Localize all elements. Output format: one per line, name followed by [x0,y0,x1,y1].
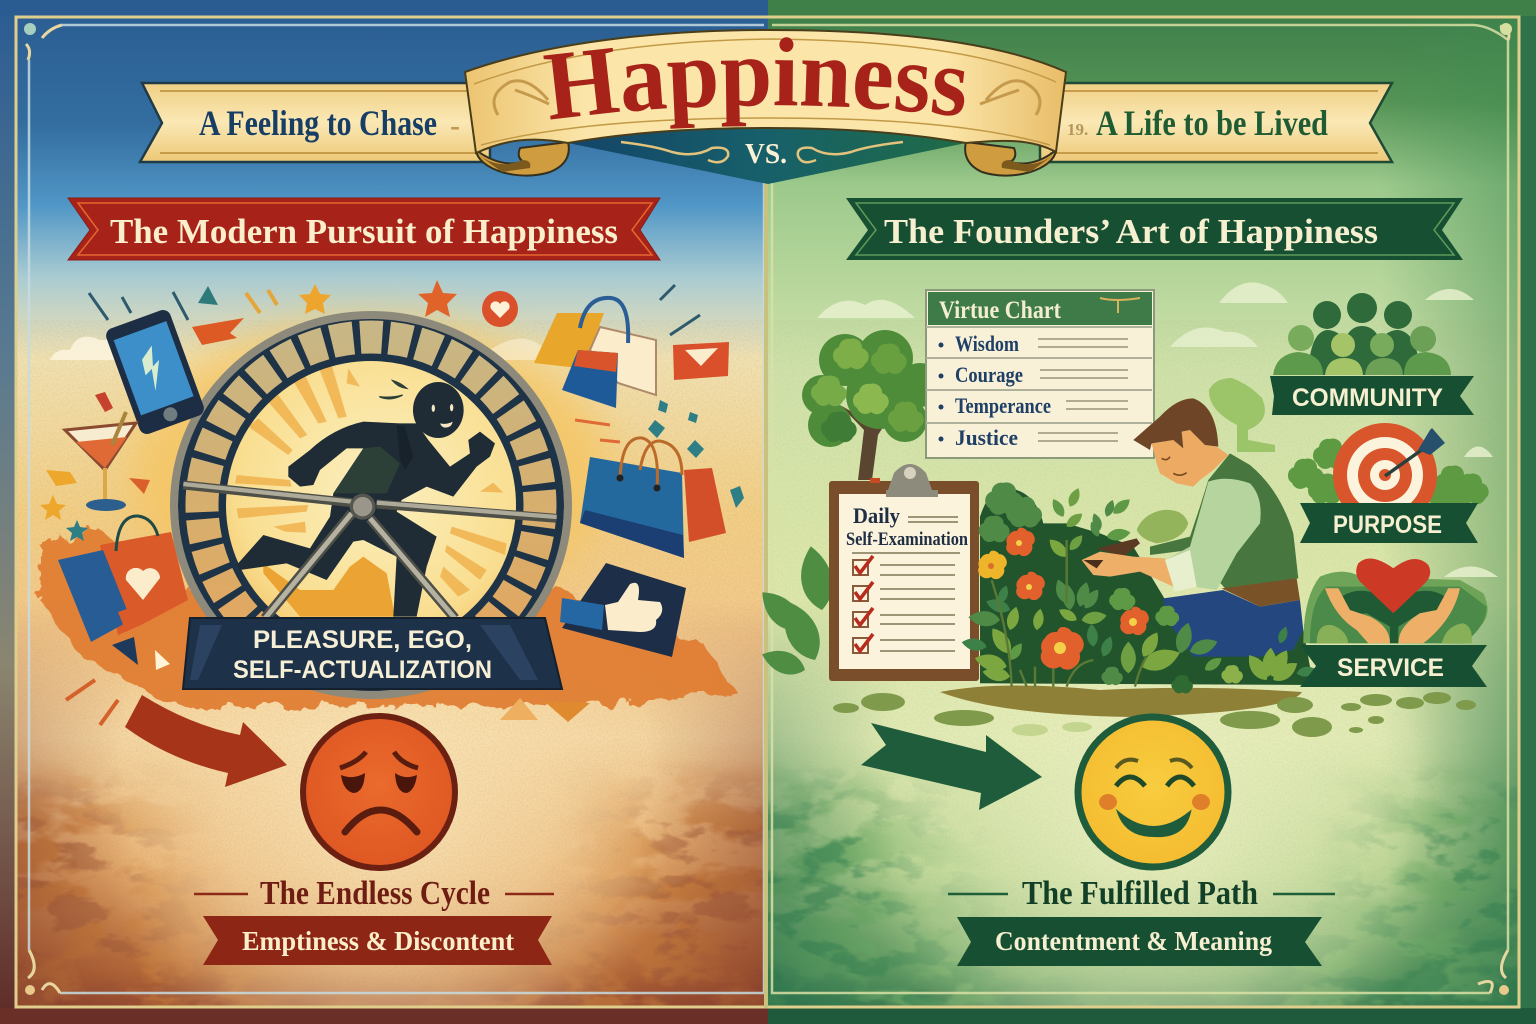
wheel spokes and stand [183,484,557,618]
panel: virtue chart: Justice [955,425,1018,450]
section heading: founders art: The Founders’ Art of Happiness [884,212,1378,251]
tool [1097,538,1140,557]
gardener vest [1150,453,1298,590]
right header ribbon: A Life to be Lived [1096,103,1328,143]
gardener trousers [1163,590,1303,657]
panel: virtue chart: Virtue Chart [939,297,1062,324]
ribbon: community: COMMUNITY [1292,384,1443,412]
hamster wheel [174,315,568,695]
panel: virtue chart [926,290,1154,458]
plant stems [992,540,1147,687]
right header ribbon [1040,83,1392,162]
gardener hair [1133,398,1218,450]
back light shrub [1137,510,1188,543]
plinth label: PLEASURE, EGO, [253,626,472,654]
icon: phone [104,308,206,436]
icon: top right shopping bags [534,285,700,408]
VS banner [568,120,966,184]
panel: daily self-examination clipboard [829,464,979,681]
section heading: founders art [846,198,1463,260]
left header ribbon [140,83,490,162]
panel: virtue chart: Courage [955,362,1023,387]
icon: target and arrow [1288,423,1489,504]
icon: bags with heart [58,516,188,642]
gardener belt [1222,578,1300,607]
gardener arm [1082,552,1173,587]
icon: smiling face [1078,717,1228,867]
panel: daily self-examination clipboard: Self-Examination [846,529,968,550]
clouds: left [50,337,570,360]
dark glove shadow [1083,560,1103,568]
distant tree [1209,378,1275,452]
icon: community people [1273,293,1451,375]
icon: envelope [673,342,729,380]
ribbon: contentment and meaning [957,917,1322,966]
icon: heart in hands [1303,559,1488,643]
ribbon: service [1300,645,1487,687]
plinth label: SELF-ACTUALIZATION [233,656,492,684]
icon: thumbs up [560,563,686,657]
icon: martini glass [65,412,136,511]
arrow: green [861,723,1042,810]
garden backdrop [980,487,1313,685]
ribbon: purpose: PURPOSE [1333,511,1442,539]
glow behind wheel [130,320,610,620]
icon: blue shopping bags [575,400,744,558]
arrow: red [125,695,287,787]
back foliage [979,482,1042,542]
gardener sleeve [1165,479,1261,590]
ribbon: emptiness and discontent [203,916,552,965]
icon: tree [802,330,942,480]
icon: heart bubble [482,291,518,327]
plinth label [183,618,562,689]
confetti and stars [40,280,590,725]
ribbon: purpose [1300,503,1478,543]
ground path and stones [833,685,1476,737]
ribbon: emptiness and discontent: Emptiness & Discontent [242,926,514,956]
panel: virtue chart: Wisdom [955,331,1019,356]
clouds: right [817,282,1498,577]
leaves [961,486,1317,693]
ribbon: contentment and meaning: Contentment & Meaning [995,926,1272,956]
left header ribbon: - [450,109,460,142]
panel: daily self-examination clipboard: Daily [853,503,900,528]
title scroll: Happiness: Happiness [543,37,964,129]
ribbon: service: SERVICE [1337,654,1444,682]
back bushes [753,544,837,680]
gardener features [1162,457,1187,475]
ribbon: community [1270,376,1474,415]
right header ribbon: 19. [1067,120,1088,139]
background: right panel [768,0,1536,1024]
running figure [237,381,495,617]
gardener cuff [1165,550,1197,592]
panel: virtue chart: Temperance [955,393,1051,418]
icon: sad face [303,716,455,868]
section heading: modern pursuit: The Modern Pursuit of Happiness [110,212,618,251]
heading: endless cycle: The Endless Cycle [260,875,490,912]
left header ribbon: A Feeling to Chase [199,103,437,143]
gardener and garden [961,398,1317,693]
section heading: modern pursuit [68,198,660,260]
heading: fulfilled path: The Fulfilled Path [1022,875,1258,912]
background: left panel [0,0,768,1024]
splash behind wheel [40,530,735,708]
title scroll: Happiness [464,29,1067,177]
flowers [978,528,1149,670]
VS banner: VS. [745,138,787,170]
gardener face [1152,430,1228,487]
